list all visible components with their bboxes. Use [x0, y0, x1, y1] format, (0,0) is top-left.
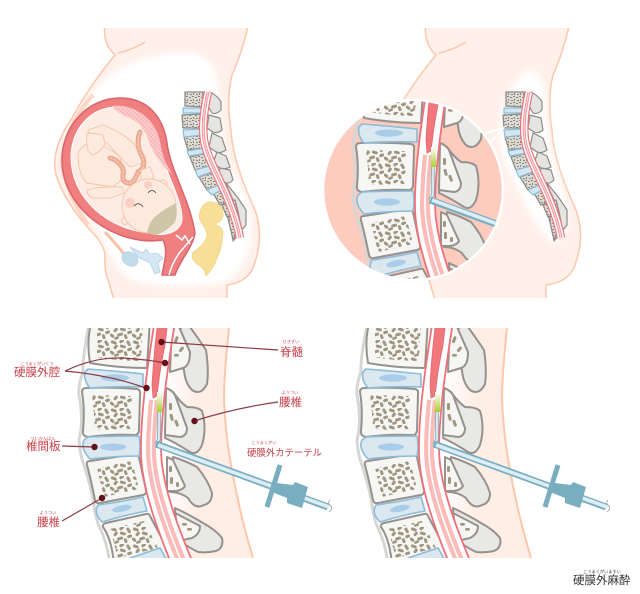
leader dots: [91, 339, 198, 501]
inner catheter: [434, 412, 437, 445]
anesthetic: [431, 147, 436, 167]
label: 腰椎 upper: ようつい: [282, 390, 298, 396]
uterus: [62, 98, 195, 275]
label: 腰椎 upper: 腰椎: [279, 395, 302, 409]
label: 硬膜外腔: 硬膜外腔: [14, 366, 60, 379]
catheter end: [607, 500, 610, 512]
inner catheter: [430, 167, 433, 200]
panel: pregnant body cross-section: [55, 20, 259, 300]
colon: [192, 202, 223, 276]
magnified circle: [324, 98, 504, 280]
label: 硬膜外カテーテル: こうまくがい: [251, 439, 277, 446]
spine: [79, 320, 222, 570]
anesthetic: [435, 392, 440, 412]
spine: [357, 320, 500, 570]
inner catheter: [156, 412, 159, 445]
abdominal cavity: [70, 53, 252, 286]
label: 腰椎 lower: ようつい: [40, 510, 56, 516]
baby eye upper: [148, 190, 156, 193]
tissue edge: [224, 328, 253, 558]
amniotic sac: [71, 107, 182, 234]
label: 腰椎 lower: [37, 510, 60, 529]
mini spine: [182, 92, 246, 241]
baby cheek: [125, 198, 135, 208]
catheter tube: [434, 444, 606, 507]
baby ear: [160, 180, 168, 186]
cervix: [169, 235, 193, 275]
label: 硬膜外カテーテル: [247, 439, 322, 458]
baby hand: [141, 167, 154, 182]
back tissue: [443, 328, 531, 558]
peach band: [62, 95, 93, 225]
tissue edge: [502, 328, 531, 558]
label: 腰椎 lower: 腰椎: [37, 515, 60, 529]
magnified spine: [351, 101, 496, 279]
label: 硬膜外カテーテル: 硬膜外カテーテル: [247, 447, 322, 458]
mini spine right: [503, 92, 567, 241]
spine halo: [499, 70, 568, 243]
title: 硬膜外麻酔: 硬膜外麻酔: [573, 573, 631, 587]
bladder: [122, 251, 138, 267]
catheter end: [329, 500, 332, 512]
panel: body with magnified lumbar circle: [324, 28, 582, 298]
baby cheek upper: [144, 181, 152, 189]
label: 硬膜外腔: [14, 360, 60, 379]
panel: unlabelled lumbar diagram: [357, 320, 610, 570]
label: 脊髄: 脊髄: [280, 345, 303, 359]
umbilical cord: [110, 132, 144, 183]
label: 脊髄: [280, 338, 303, 359]
needle tube: [428, 196, 496, 227]
title: 硬膜外麻酔: こうまくがいますい: [583, 568, 621, 575]
panel: labelled lumbar diagram: [14, 320, 332, 570]
baby body: [78, 125, 142, 198]
title: 硬膜外麻酔: [573, 568, 631, 587]
label: 椎間板: 椎間板: [26, 439, 61, 453]
catheter hub: [550, 482, 586, 508]
anesthetic: [157, 392, 162, 412]
back tissue: [165, 328, 253, 558]
breast crease right: [439, 42, 466, 53]
label: 腰椎 upper: [279, 390, 302, 409]
label: 硬膜外腔: こうまくがいくう: [20, 360, 54, 367]
catheter tube: [156, 444, 328, 507]
bladder frill: [130, 247, 163, 274]
urethra band: [104, 231, 124, 254]
baby hair: [147, 203, 177, 235]
baby head: [122, 179, 176, 233]
catheter wing: [545, 465, 558, 507]
label: 脊髄: せきずい: [283, 338, 299, 345]
breast crease: [118, 42, 145, 53]
baby ear lower: [122, 218, 128, 224]
leaders: [62, 342, 278, 521]
body outline: [55, 20, 259, 300]
body outline right: [403, 28, 582, 298]
catheter hub: [272, 482, 308, 508]
catheter wing: [267, 465, 280, 507]
label: 椎間板: ついかんばん: [30, 435, 56, 442]
baby eye: [134, 204, 143, 207]
magnifier pointer: [480, 128, 503, 143]
label: 椎間板: [26, 435, 61, 453]
placenta: [112, 106, 173, 175]
